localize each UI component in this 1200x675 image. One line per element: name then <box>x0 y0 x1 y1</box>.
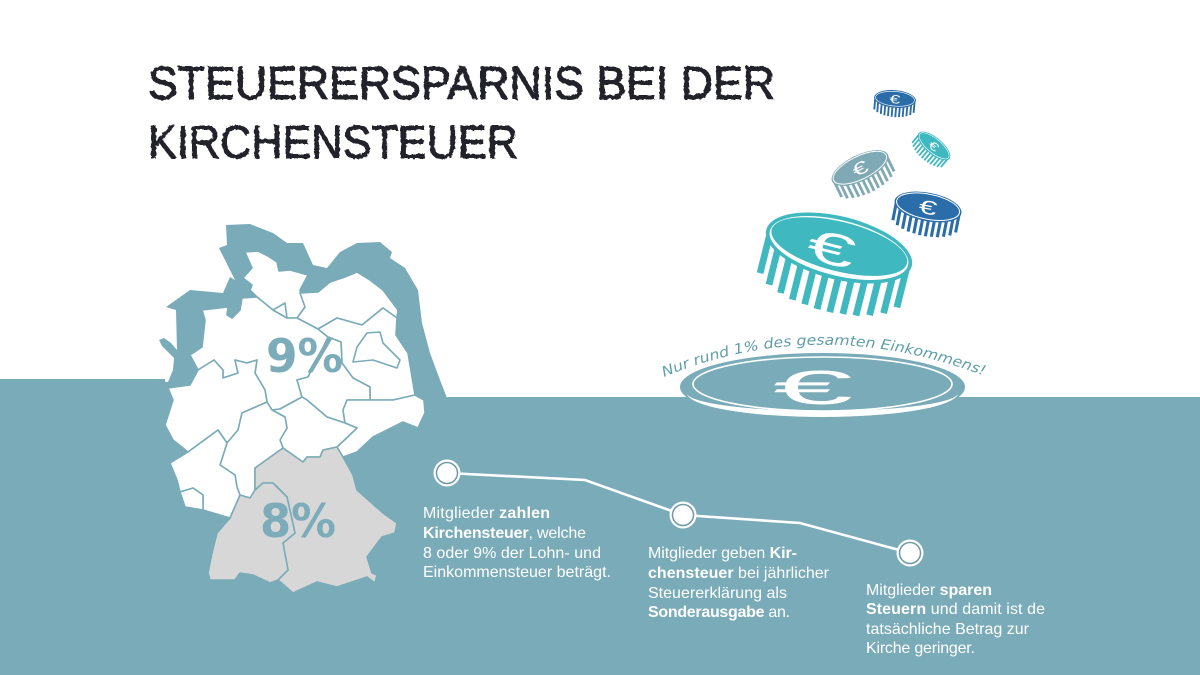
text block 1: Einkommensteuer beträgt. <box>423 564 611 581</box>
text: Nur rund 1% des gesamten Einkommens! <box>662 336 986 377</box>
text block 2 <box>648 545 830 621</box>
coin on ground <box>680 353 965 421</box>
text block 3: Mitglieder sparen <box>866 582 992 599</box>
text block 2: Mitglieder geben Kir- <box>648 545 797 562</box>
timeline <box>434 460 924 566</box>
coin on ground: € <box>773 361 853 414</box>
coin: small turquoise: € <box>926 138 942 155</box>
text block 1 <box>423 505 611 581</box>
coin: small turquoise <box>908 127 955 172</box>
map: Mecklenburg-Vorpommern <box>297 272 398 329</box>
timeline node 1 <box>434 460 460 486</box>
map: Thüringen <box>272 397 357 462</box>
text block 1: 8 oder 9% der Lohn- und <box>423 545 601 562</box>
text block 1: Mitglieder zahlen <box>423 505 550 522</box>
map: Nordrhein-Westfalen <box>165 360 267 452</box>
coin: grey <box>826 143 900 206</box>
text block 3 <box>866 582 1045 657</box>
text block 3: Kirche geringer. <box>866 640 975 657</box>
text block 2: Steuererklärung als <box>648 585 787 602</box>
coin: small blue top: € <box>889 93 901 107</box>
text block 1: Kirchensteuer, welche <box>423 525 586 542</box>
text block 3: Steuern und damit ist de <box>866 601 1045 618</box>
map: Baden-Württemberg <box>208 483 295 583</box>
curved note <box>664 345 995 380</box>
map: Schleswig-Holstein <box>243 251 308 318</box>
map: Brandenburg <box>318 308 415 400</box>
map: Hessen <box>220 402 287 498</box>
title <box>148 57 775 168</box>
text block 3: tatsächliche Betrag zur <box>866 621 1030 638</box>
map: Berlin <box>353 332 400 368</box>
coin: blue <box>889 186 964 242</box>
map: Bayern <box>255 447 397 593</box>
map: Saarland <box>180 488 203 510</box>
timeline node 2 <box>670 502 696 528</box>
coin: large turquoise <box>751 199 919 329</box>
text block 2: chensteuer bei jährlicher <box>648 565 830 582</box>
title: STEUERERSPARNIS BEI DER <box>148 57 775 109</box>
label: 8%: 8% <box>260 494 336 548</box>
timeline node 3 <box>896 540 924 566</box>
map: Sachsen <box>337 395 425 457</box>
map: Rheinland-Pfalz <box>170 430 240 518</box>
coin: large turquoise: € <box>802 219 861 279</box>
map of Germany <box>140 224 447 593</box>
map: Hamburg and Bremen <box>273 303 287 318</box>
text block 2: Sonderausgabe an. <box>648 604 790 621</box>
teal ground band <box>0 379 1200 675</box>
map: Sachsen-Anhalt <box>297 337 370 423</box>
map: teal coast silhouette <box>140 224 447 420</box>
coin: grey: € <box>849 156 871 181</box>
label: 9%: 9% <box>266 329 343 383</box>
map: Niedersachsen <box>190 297 328 410</box>
title: KIRCHENSTEUER <box>148 116 518 168</box>
coin: blue: € <box>917 195 939 220</box>
coin: small blue top <box>873 88 917 119</box>
